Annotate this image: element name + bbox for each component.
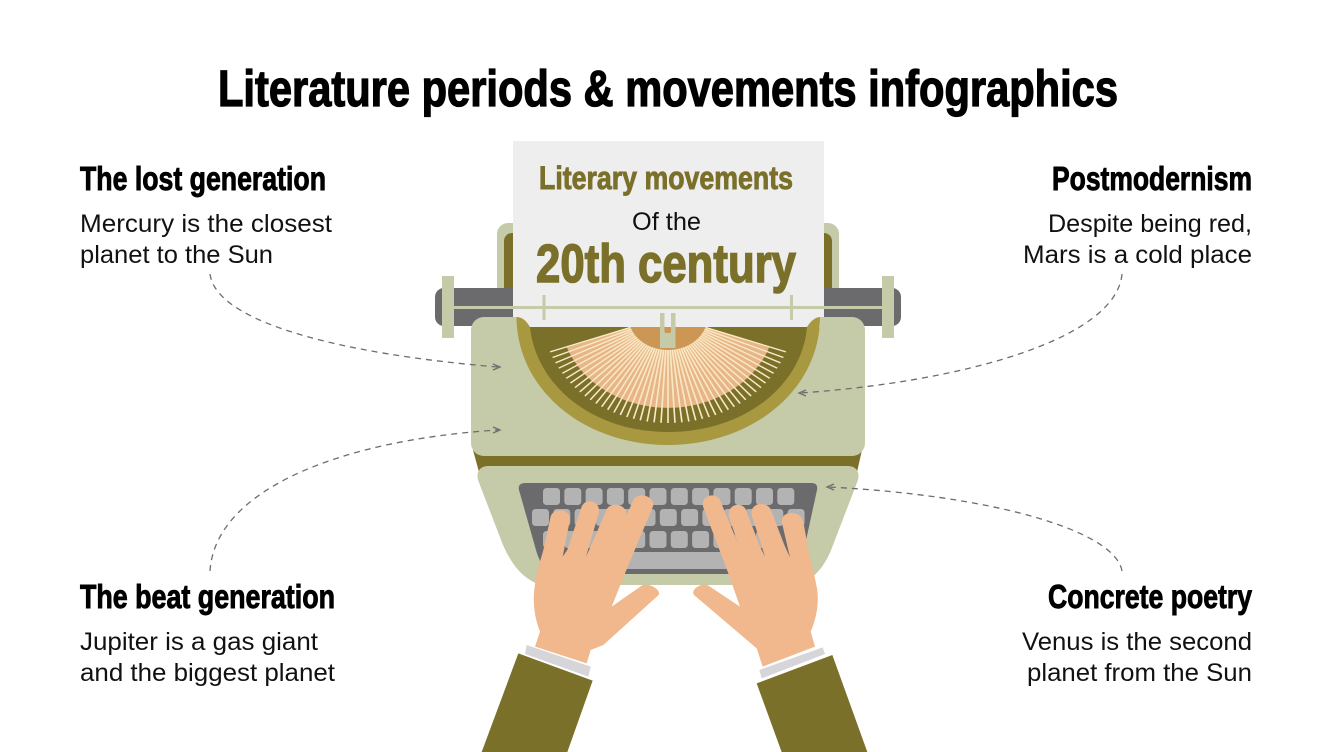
keyboard deck bbox=[477, 466, 859, 585]
text block: concrete poetry bbox=[1022, 578, 1253, 687]
keyboard base bbox=[519, 483, 817, 574]
typebar fan bbox=[550, 327, 786, 423]
description: planet to the Sun bbox=[80, 241, 273, 269]
right cuff bbox=[759, 647, 825, 678]
right hand bbox=[693, 495, 818, 667]
title: Literature periods & movements infographics bbox=[218, 60, 1118, 117]
left arm bbox=[482, 495, 659, 752]
right arm bbox=[693, 495, 867, 752]
typebar basket rim bbox=[516, 317, 820, 445]
fan centre bbox=[630, 327, 706, 350]
left hand bbox=[534, 495, 659, 663]
typebars bbox=[550, 327, 786, 423]
left cuff bbox=[525, 645, 591, 677]
description: planet from the Sun bbox=[1027, 659, 1252, 687]
illustration: hands and sleeves bbox=[482, 495, 867, 752]
typebar basket bbox=[530, 327, 807, 432]
key rows bbox=[532, 488, 805, 569]
arrow: lost generation to body bbox=[210, 274, 500, 370]
left sleeve bbox=[482, 653, 593, 752]
arrow: beat generation to body bbox=[210, 427, 500, 571]
heading: Concrete poetry bbox=[1048, 578, 1253, 615]
heading: The beat generation bbox=[80, 578, 335, 615]
large heading on paper: 20th century bbox=[536, 234, 796, 294]
heading on paper: Literary movements bbox=[539, 160, 793, 196]
description: Despite being red, bbox=[1048, 210, 1252, 238]
rear paper support bbox=[497, 223, 839, 303]
right sleeve bbox=[757, 655, 867, 752]
text block: postmodernism bbox=[1023, 160, 1252, 269]
description: Jupiter is a gas giant bbox=[80, 628, 318, 656]
description: Mercury is the closest bbox=[80, 210, 332, 238]
arrow: concrete poetry to keyboard bbox=[827, 484, 1122, 571]
roller with knobs bbox=[435, 276, 901, 338]
arrow: postmodernism to basket bbox=[799, 274, 1122, 396]
type guide bbox=[660, 313, 676, 348]
heading: Postmodernism bbox=[1052, 160, 1252, 197]
upper body bbox=[471, 317, 865, 456]
fan tan sector bbox=[567, 327, 769, 408]
text block: the lost generation bbox=[80, 160, 332, 269]
paper sheet bbox=[513, 141, 824, 318]
paper rail bbox=[453, 295, 883, 320]
heading: The lost generation bbox=[80, 160, 326, 197]
description: Mars is a cold place bbox=[1023, 241, 1252, 269]
description: and the biggest planet bbox=[80, 659, 335, 687]
text block: the beat generation bbox=[80, 578, 335, 687]
paper bottom edge bbox=[517, 316, 820, 328]
lower chassis strip bbox=[473, 450, 862, 472]
description: Venus is the second bbox=[1022, 628, 1252, 656]
illustration: typewriter bbox=[435, 141, 901, 585]
keyboard bbox=[519, 483, 817, 574]
subheading on paper: Of the bbox=[632, 208, 701, 236]
